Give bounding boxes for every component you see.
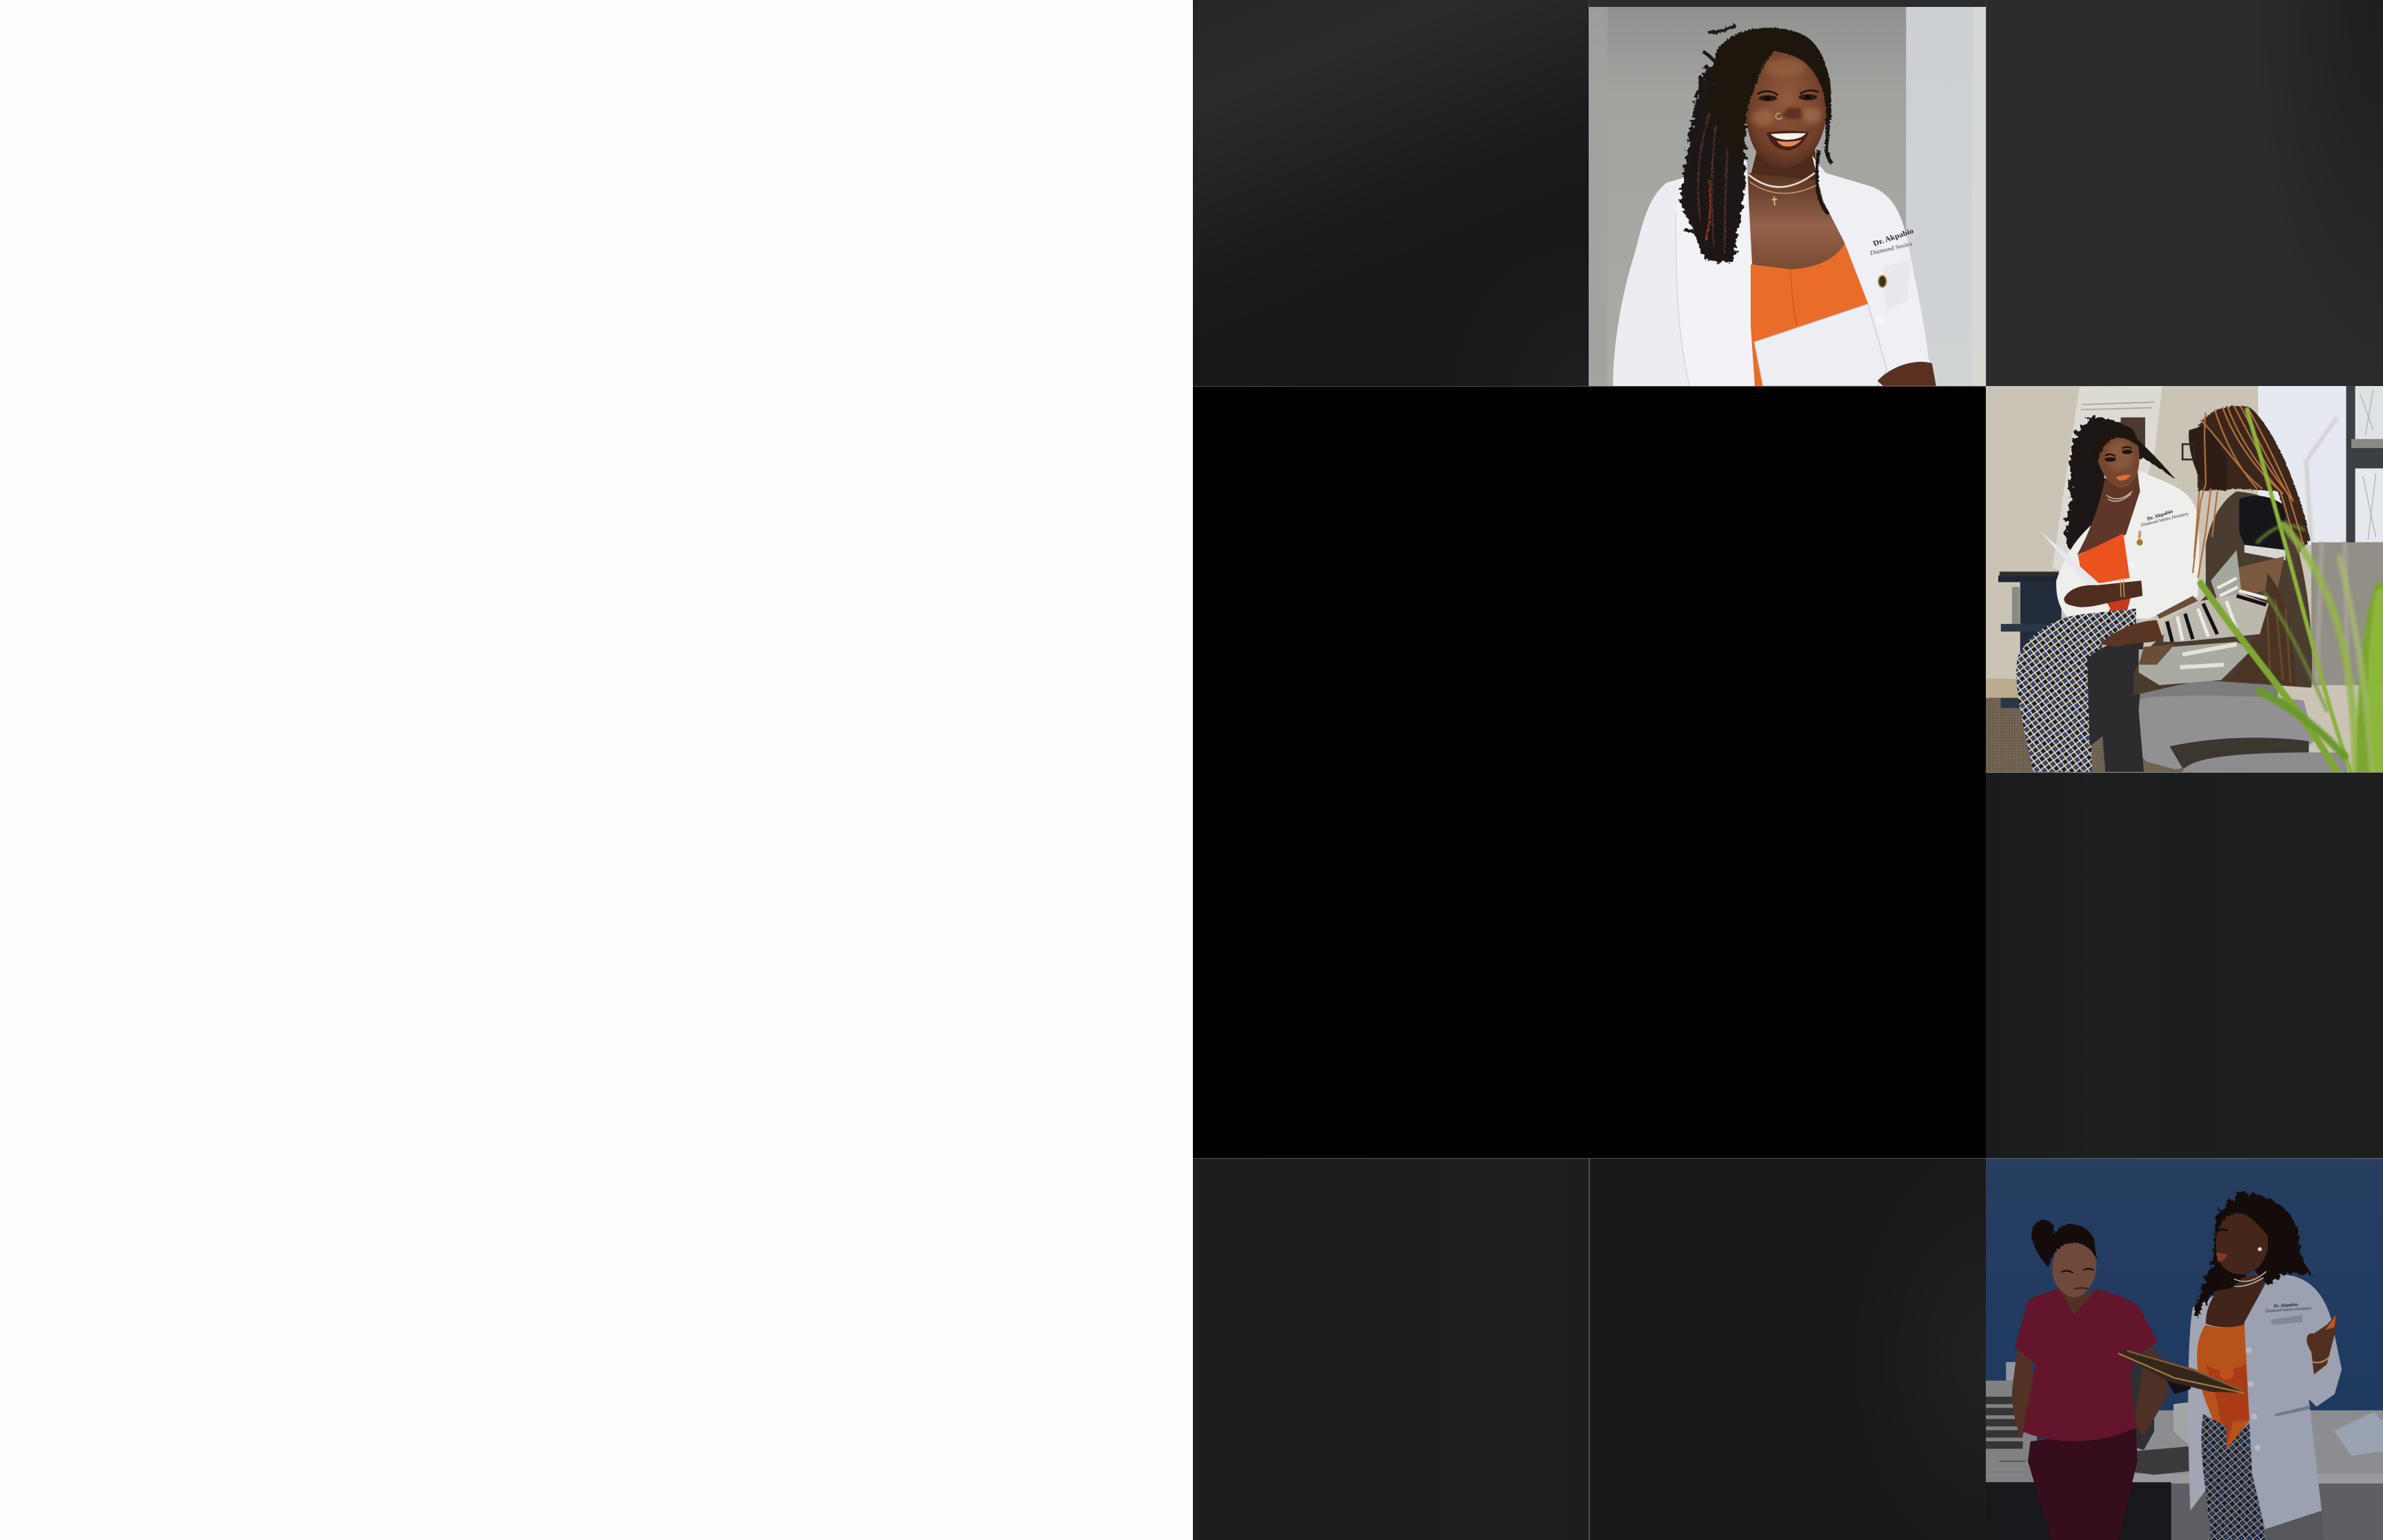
photo: dentist consulting with patient on sofa xyxy=(1986,386,2383,772)
photo: dentist consulting with patient on sofa: Dr. Akpabio xyxy=(2146,508,2173,522)
photo: portrait of dentist in white coat xyxy=(1589,7,1986,386)
panel: dark tile top left xyxy=(1193,0,1589,386)
panel: blank white column xyxy=(0,0,1193,1540)
panel: large black block xyxy=(1193,386,1986,1158)
panel: dark tile bottom left xyxy=(1193,1158,1589,1540)
photo: dentist talking with assistant in maroon scrubs: Dr. Akpabio xyxy=(2274,1302,2298,1309)
photo: dentist talking with assistant in maroon scrubs xyxy=(1986,1158,2383,1540)
photo: dentist talking with assistant in maroon scrubs: Diamond Smiles Dentistry xyxy=(2264,1306,2312,1314)
panel: dark tile top right xyxy=(1986,0,2383,386)
panel: dark strip above portrait xyxy=(1589,0,1986,7)
photo: portrait of dentist in white coat: Dr. Akpabio xyxy=(1872,227,1915,248)
photo: dentist consulting with patient on sofa: Diamond Smiles Dentistry xyxy=(2140,511,2189,528)
panel: dark tile bottom centre xyxy=(1589,1158,1986,1540)
photo: portrait of dentist in white coat: Diamond Smiles xyxy=(1869,241,1913,256)
panel: dark tile middle right xyxy=(1986,772,2383,1158)
